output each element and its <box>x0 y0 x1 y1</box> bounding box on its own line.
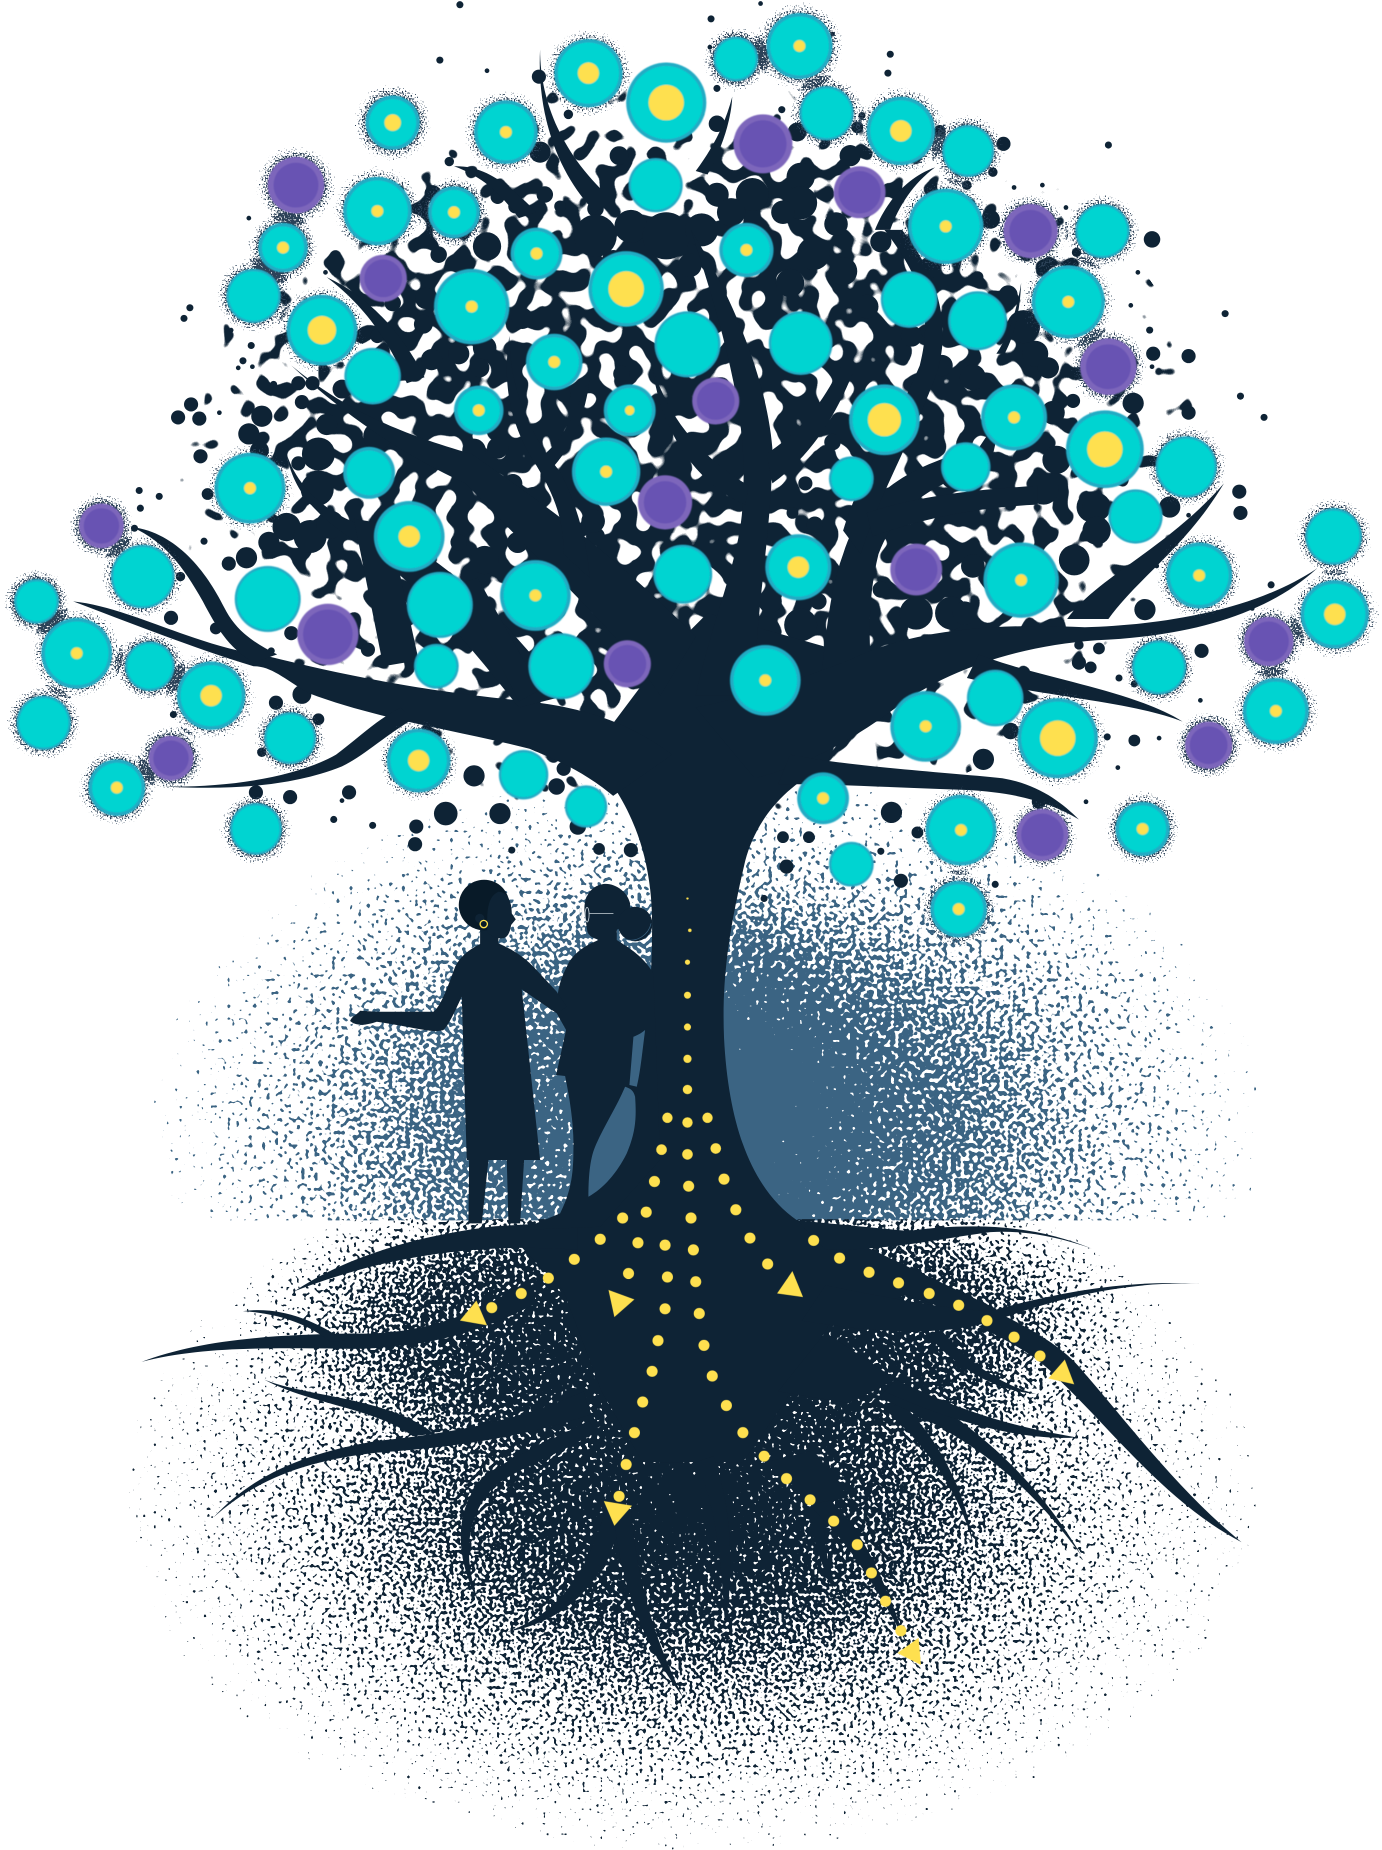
blossom <box>1301 580 1369 649</box>
blossom <box>908 189 983 264</box>
purple flower <box>1185 722 1232 769</box>
purple flower <box>1244 617 1294 666</box>
blossom <box>474 100 538 164</box>
blossom <box>626 62 706 143</box>
arrow: right root <box>1048 1359 1074 1384</box>
blossom <box>1156 436 1217 498</box>
yellow dots flowing through trunk and roots <box>486 897 1046 1636</box>
purple flower <box>360 255 407 302</box>
blossom <box>41 618 112 689</box>
blossom <box>713 37 758 81</box>
blossom <box>967 670 1024 726</box>
blossom <box>890 691 961 762</box>
blossom <box>235 566 301 632</box>
blossom <box>344 348 401 404</box>
blossom <box>17 696 71 750</box>
purple flower <box>1003 204 1058 258</box>
blossom <box>414 644 459 689</box>
purple flower <box>268 157 324 213</box>
woman with hoop earring, arm outstretched <box>350 880 567 1223</box>
purple flower <box>692 377 739 424</box>
blossom <box>730 645 801 716</box>
blossom <box>930 881 987 937</box>
blossom <box>1066 410 1144 488</box>
blossom <box>499 750 548 799</box>
blossoms: teal and yellow fruit, purple flowers <box>14 13 1369 937</box>
blue gaps beside her legs <box>588 1087 636 1197</box>
blue stipple background behind the trunk <box>154 784 1256 1220</box>
blossom <box>343 177 412 245</box>
blossom <box>1166 542 1232 608</box>
glasses <box>579 907 613 922</box>
blossom <box>829 842 874 887</box>
blossom <box>942 125 994 177</box>
two women standing by the trunk <box>350 880 660 1230</box>
roots <box>142 1279 537 1362</box>
blossom <box>1018 698 1098 778</box>
blossom <box>654 311 720 377</box>
purple flower <box>1016 809 1068 861</box>
blossom <box>797 772 849 824</box>
trunk and root flare <box>507 613 996 1462</box>
purple flower <box>149 736 193 781</box>
blossom <box>88 759 145 816</box>
blossom <box>111 545 175 608</box>
purple flower <box>834 166 886 218</box>
blossom <box>829 456 874 501</box>
blossom <box>1108 489 1163 544</box>
blossom <box>258 223 308 272</box>
blossom <box>799 86 854 140</box>
blossom <box>264 712 316 764</box>
blossom <box>983 542 1059 618</box>
canopy splatter <box>131 1 1275 902</box>
blossom <box>230 803 282 855</box>
blossom <box>881 271 937 328</box>
blossom <box>981 384 1047 450</box>
blossom <box>434 269 509 344</box>
blossom <box>849 384 920 455</box>
blossom <box>554 39 623 107</box>
purple flower <box>733 114 792 173</box>
blossom <box>1115 802 1170 856</box>
arrow: lower left root <box>604 1501 632 1526</box>
blossom <box>125 641 175 691</box>
blossom <box>766 13 832 79</box>
blossom <box>926 795 996 865</box>
blossom <box>177 661 245 730</box>
purple flower <box>604 640 651 687</box>
blossom <box>653 545 712 604</box>
blossom <box>604 384 656 436</box>
blossom <box>14 579 59 624</box>
blossom <box>428 186 480 238</box>
arrow: lower right root <box>897 1638 921 1665</box>
purple flower <box>1080 338 1137 395</box>
blossom <box>343 447 395 499</box>
blossom <box>867 97 935 165</box>
blossom <box>454 386 504 435</box>
blossom <box>287 295 357 366</box>
blossom <box>948 291 1007 350</box>
arrow: inner left root <box>608 1290 634 1317</box>
blossom <box>629 158 683 212</box>
blossom <box>588 251 664 327</box>
blossom <box>1075 204 1130 258</box>
blossom <box>572 437 640 506</box>
purple flower <box>638 475 692 529</box>
dark stipple soil around the roots <box>130 1219 1256 1850</box>
purple flower <box>297 604 358 665</box>
blossom <box>226 269 281 323</box>
blossom <box>941 442 990 492</box>
blossom <box>526 334 583 390</box>
stippled halos around blossoms <box>4 1 1380 948</box>
blossom <box>387 729 450 792</box>
purple flower <box>890 544 942 595</box>
blossom <box>528 633 594 699</box>
blossom <box>511 228 562 279</box>
arrow: inner right root <box>777 1271 803 1297</box>
blossom <box>769 311 832 375</box>
blossom <box>1243 678 1309 744</box>
arrow: left root <box>460 1301 487 1325</box>
purple flower <box>79 503 124 548</box>
branches <box>73 601 672 796</box>
blossom <box>719 223 774 277</box>
blossom <box>366 96 420 150</box>
blossom <box>407 572 473 638</box>
blossom <box>1132 640 1186 694</box>
blossom <box>1032 265 1105 338</box>
blossom <box>374 501 445 572</box>
blossom <box>765 534 831 600</box>
blossom <box>500 560 571 631</box>
blossom <box>1305 508 1362 565</box>
blossom <box>565 785 607 828</box>
woman in glasses, seen from behind the trunk <box>520 884 660 1230</box>
blossom <box>215 453 285 524</box>
